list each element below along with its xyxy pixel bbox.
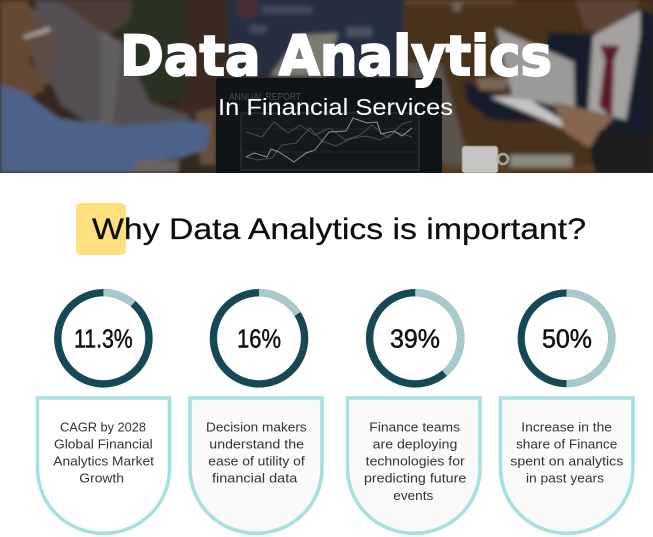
ring 39%: 39% (390, 326, 440, 354)
coffee cup (462, 146, 508, 173)
card: CAGR: Global Financial (54, 438, 153, 452)
stat 3: 39% (348, 293, 480, 533)
stat 4: 50% (500, 293, 633, 533)
card: increase in share: Increase in the (521, 420, 612, 434)
card: decision makers: Decision makers (206, 420, 307, 434)
card: increase in share: in past years (526, 472, 604, 486)
card: finance teams: predicting future (364, 472, 466, 486)
ring 50%: 50% (542, 326, 592, 354)
subtitle: In Financial Services (218, 94, 453, 120)
card: finance teams: events (393, 489, 433, 503)
header photo banner (0, 0, 653, 178)
title: Data Analytics (120, 24, 552, 88)
card: finance teams: Finance teams (369, 420, 460, 434)
laptop with report chart (216, 78, 442, 178)
ring 16%: 16% (237, 326, 281, 354)
card: increase in share: share of Finance (516, 438, 617, 452)
card: finance teams: technologies for (366, 454, 465, 468)
section heading: Why Data Analytics is important? (92, 213, 586, 246)
card: CAGR (38, 398, 170, 533)
card: finance teams: are deploying (373, 438, 457, 452)
card: increase in share (500, 398, 633, 533)
ring 11.3%: 11.3% (74, 326, 133, 354)
card: CAGR: Analytics Market (53, 454, 155, 468)
card: CAGR: Growth (79, 472, 124, 486)
card: decision makers: ease of utility of (208, 454, 305, 468)
laptop with report chart: ANNUAL REPORT (229, 92, 301, 103)
card: decision makers: understand the (209, 438, 304, 452)
ring 11.3% (58, 293, 149, 384)
ring 39% (370, 293, 461, 384)
heading highlight square (76, 203, 126, 255)
card: CAGR: CAGR by 2028 (60, 420, 146, 434)
stat 1: 11.3% (38, 293, 170, 533)
ring 16% (213, 293, 305, 384)
stat 2: 16% (190, 293, 322, 533)
card: decision makers (190, 398, 322, 533)
ring 50% (521, 293, 612, 384)
card: finance teams (348, 398, 480, 533)
card: increase in share: spent on analytics (510, 454, 623, 468)
section heading (76, 203, 586, 255)
card: decision makers: financial data (212, 472, 297, 486)
